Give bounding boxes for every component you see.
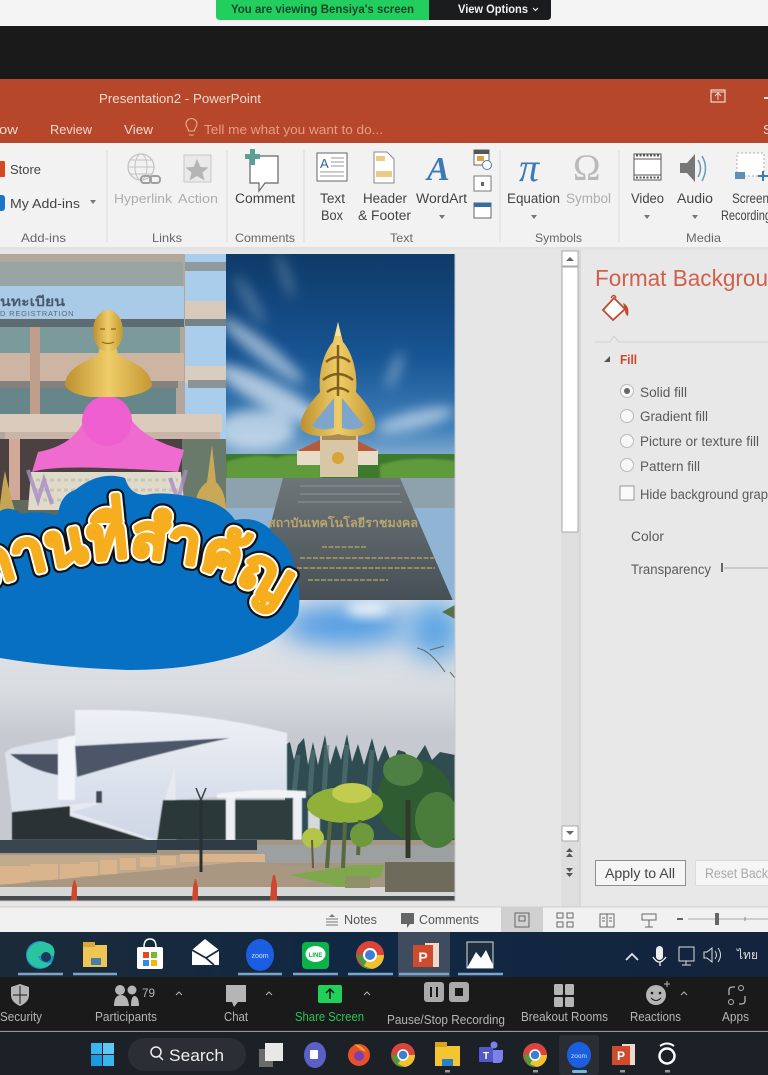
slide: photo of gold bust bbox=[0, 254, 226, 515]
icon: powerpoint: P bbox=[418, 949, 428, 965]
security: Security bbox=[0, 1010, 43, 1024]
status bar: Notes bbox=[344, 913, 377, 927]
fill options: Solid fill bbox=[640, 385, 687, 400]
fill options: Transparency bbox=[631, 562, 711, 577]
slide scrollbar bbox=[561, 250, 580, 907]
links group bbox=[114, 154, 218, 245]
icon: paint bucket bbox=[603, 296, 628, 320]
participants bbox=[95, 985, 182, 1024]
zoom viewing banner: View Options bbox=[458, 4, 528, 16]
icon: teams: T bbox=[483, 1051, 489, 1062]
apply to all button: Apply to All bbox=[605, 866, 675, 881]
share screen bbox=[295, 985, 370, 1024]
media group: Audio bbox=[677, 191, 713, 206]
ground and pots bbox=[0, 840, 454, 887]
icon: zoom: zoom bbox=[251, 953, 269, 960]
fill options: Color bbox=[631, 529, 665, 544]
ribbon bbox=[0, 143, 768, 250]
comments group: Comments bbox=[235, 231, 295, 245]
editor workspace background bbox=[0, 250, 768, 907]
format background pane: Format Backgrou bbox=[595, 265, 768, 291]
icon: file explorer bbox=[435, 1042, 460, 1072]
reactions: Reactions bbox=[630, 1010, 681, 1024]
share screen: Share Screen bbox=[295, 1010, 364, 1024]
icon: windows start bbox=[91, 1043, 114, 1066]
text group: Text bbox=[320, 191, 345, 206]
status bar: Comments bbox=[419, 913, 479, 927]
icon: chrome bbox=[356, 941, 384, 969]
windows 11 taskbar bbox=[0, 1032, 768, 1075]
symbols group: Ω bbox=[573, 148, 600, 189]
tree foliage bbox=[377, 760, 453, 840]
apps: Apps bbox=[722, 1010, 749, 1024]
symbols group: Symbols bbox=[535, 231, 582, 245]
icon: chrome bbox=[391, 1043, 415, 1067]
text group bbox=[317, 150, 492, 245]
symbols group: Equation bbox=[507, 191, 560, 206]
security bbox=[0, 984, 43, 1024]
add-ins group: Store bbox=[10, 162, 41, 177]
slide: photo of gold monument: สถาบันเทคโนโลยีราชมงคล bbox=[268, 515, 418, 530]
media group: Video bbox=[631, 191, 664, 206]
slide: photo of gold monument bbox=[211, 251, 456, 601]
format background pane bbox=[581, 250, 768, 907]
icon: powerpoint bbox=[612, 1044, 635, 1072]
reset background button bbox=[696, 860, 768, 886]
fill options: Picture or texture fill bbox=[640, 434, 759, 449]
chat: Chat bbox=[224, 1010, 248, 1024]
participants: Participants bbox=[95, 1010, 157, 1024]
icon: teams bbox=[479, 1042, 503, 1063]
pause stop recording bbox=[387, 982, 505, 1027]
icon: meet bbox=[304, 1042, 326, 1068]
fill options: Gradient fill bbox=[640, 409, 708, 424]
windows taskbar of presenter: ไทย bbox=[736, 948, 758, 962]
icon: zoom bbox=[246, 939, 274, 971]
zoom meeting toolbar bbox=[0, 977, 768, 1031]
branches at right edge bbox=[417, 646, 455, 678]
powerpoint title bar: Presentation2 - PowerPoint bbox=[99, 91, 261, 106]
add-ins group: My Add-ins bbox=[10, 196, 81, 211]
windows taskbar of presenter bbox=[0, 932, 768, 977]
add-ins group: Add-ins bbox=[21, 231, 66, 245]
powerpoint title bar: View bbox=[124, 122, 154, 137]
media group: Media bbox=[686, 231, 721, 245]
media group bbox=[631, 153, 768, 245]
fill options bbox=[620, 384, 768, 577]
text group: Text bbox=[390, 231, 414, 245]
icon: zoom active: zoom bbox=[571, 1053, 587, 1060]
icon: photos bbox=[467, 942, 493, 968]
zoom viewing banner bbox=[0, 0, 768, 26]
powerpoint title bar: Review bbox=[50, 122, 93, 137]
text group: Header bbox=[363, 191, 407, 206]
icon: powerpoint bbox=[413, 943, 439, 967]
zoom viewing banner: You are viewing Bensiya's screen bbox=[231, 4, 414, 16]
comments group: Comment bbox=[235, 191, 295, 206]
text group: A bbox=[320, 156, 329, 171]
breakout rooms bbox=[521, 984, 608, 1024]
format background pane: Fill bbox=[620, 353, 637, 367]
links group: Hyperlink bbox=[114, 191, 173, 206]
add-ins group bbox=[0, 161, 96, 245]
symbols group: Symbol bbox=[566, 191, 611, 206]
distant conifers bbox=[285, 734, 455, 840]
slide: photo of modern white building bbox=[0, 600, 463, 901]
text group: Box bbox=[321, 208, 343, 223]
icon: line bbox=[302, 942, 329, 969]
text group: WordArt bbox=[416, 191, 467, 206]
fill options: Pattern fill bbox=[640, 459, 700, 474]
icon: circle app bbox=[660, 1044, 674, 1072]
icon: line: LINE bbox=[309, 953, 322, 959]
icon: firefox bbox=[348, 1044, 370, 1066]
icon: edge bbox=[26, 941, 54, 969]
breakout rooms: Breakout Rooms bbox=[521, 1010, 608, 1024]
slide: photo of gold bust: D REGISTRATION bbox=[0, 309, 74, 318]
powerpoint title bar: Tell me what you want to do... bbox=[204, 122, 383, 137]
icon: folder bbox=[83, 942, 107, 967]
slide: photo of gold bust: นทะเบียน bbox=[0, 294, 65, 310]
pause stop recording: Pause/Stop Recording bbox=[387, 1013, 505, 1027]
symbols group bbox=[507, 145, 611, 245]
text group: A bbox=[425, 151, 450, 188]
blue title blob with heading bbox=[0, 476, 300, 670]
text group: & Footer bbox=[358, 208, 412, 223]
powerpoint title bar bbox=[0, 79, 768, 143]
chat bbox=[224, 985, 272, 1024]
white building bbox=[5, 710, 320, 845]
icon: mail bbox=[192, 939, 219, 965]
comments group bbox=[235, 149, 295, 245]
status bar bbox=[0, 907, 768, 932]
icon: store bbox=[137, 939, 163, 969]
black letterbox band bbox=[0, 26, 768, 79]
icon: powerpoint: P bbox=[617, 1049, 625, 1063]
icon: task view bbox=[259, 1043, 283, 1067]
search box: Search bbox=[169, 1046, 224, 1065]
icon: zoom active bbox=[559, 1035, 599, 1075]
links group: Action bbox=[178, 191, 218, 206]
symbols group: π bbox=[519, 145, 540, 190]
slide frame edge bbox=[0, 254, 455, 901]
apply to all button bbox=[596, 860, 686, 886]
apps bbox=[722, 986, 749, 1024]
reactions bbox=[630, 981, 687, 1024]
participants: 79 bbox=[142, 986, 155, 1000]
links group: Links bbox=[152, 231, 182, 245]
search box bbox=[128, 1038, 246, 1071]
icon: chrome bbox=[523, 1043, 547, 1072]
